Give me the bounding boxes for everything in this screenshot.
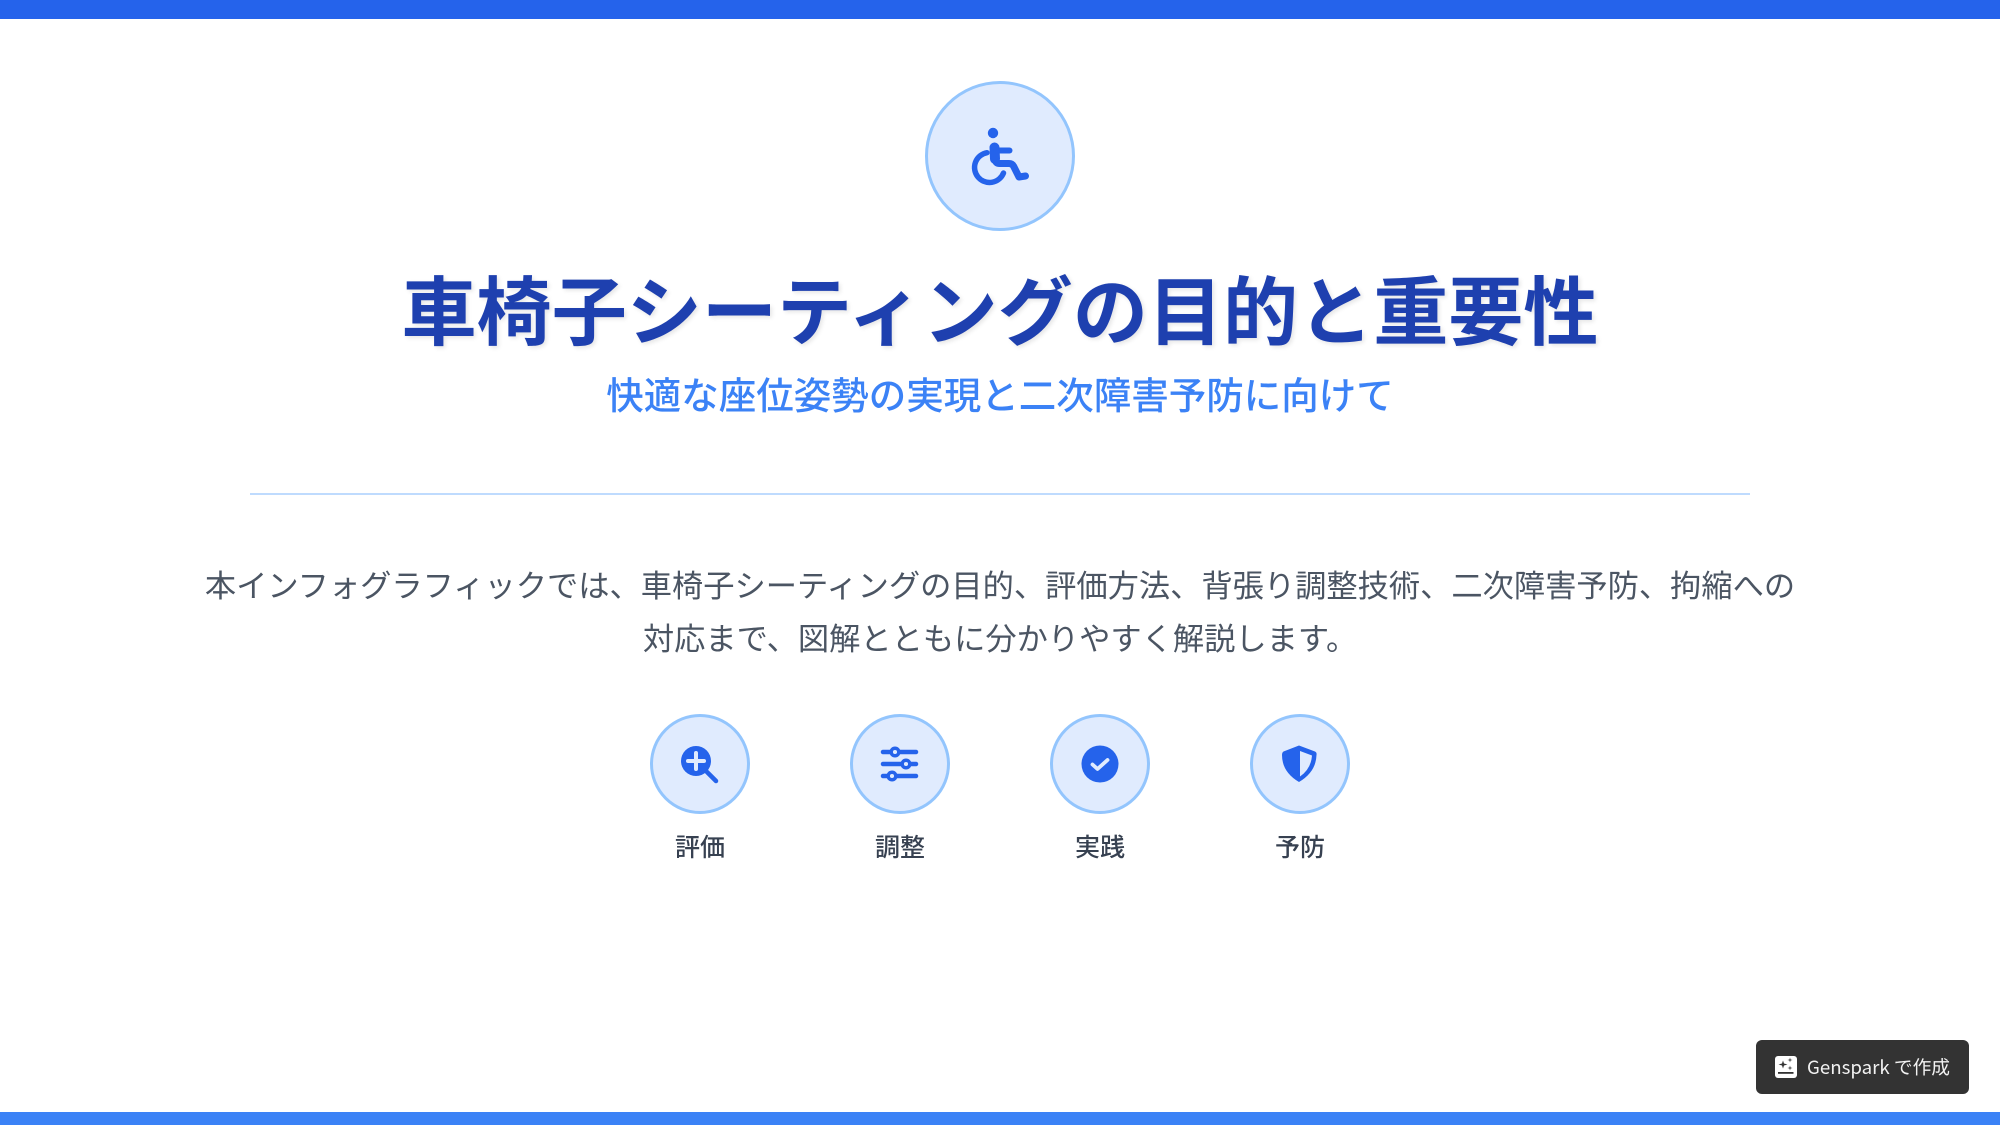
badge: Genspark	[1756, 1040, 1969, 1094]
intro text	[205, 561, 1795, 659]
icon row	[650, 714, 1350, 864]
badge text: Genspark で作成	[1807, 1053, 1950, 1080]
icon: Genspark logo	[1775, 1056, 1797, 1078]
label: adjustment: 調整	[875, 828, 925, 864]
icon: evaluation magnifier	[650, 714, 750, 814]
label: prevention: 予防	[1275, 828, 1325, 864]
label: practice: 実践	[1075, 828, 1125, 864]
label: evaluation: 評価	[675, 828, 725, 864]
bottom bar	[0, 1112, 2000, 1125]
icon: wheelchair	[925, 81, 1075, 231]
intro text: 本インフォグラフィックでは、車椅子シーティングの目的、評価方法、背張り調整技術、二次障害予防、拘縮への	[205, 561, 1795, 606]
title: 車椅子シーティングの目的と重要性	[402, 252, 1598, 361]
icon: practice check	[1050, 714, 1150, 814]
divider	[250, 493, 1750, 495]
subtitle: 快適な座位姿勢の実現と二次障害予防に向けて	[606, 364, 1394, 420]
intro text: 対応まで、図解とともに分かりやすく解説します。	[643, 614, 1357, 659]
top bar	[0, 0, 2000, 19]
icon: adjustment sliders	[850, 714, 950, 814]
icon: prevention shield	[1250, 714, 1350, 814]
